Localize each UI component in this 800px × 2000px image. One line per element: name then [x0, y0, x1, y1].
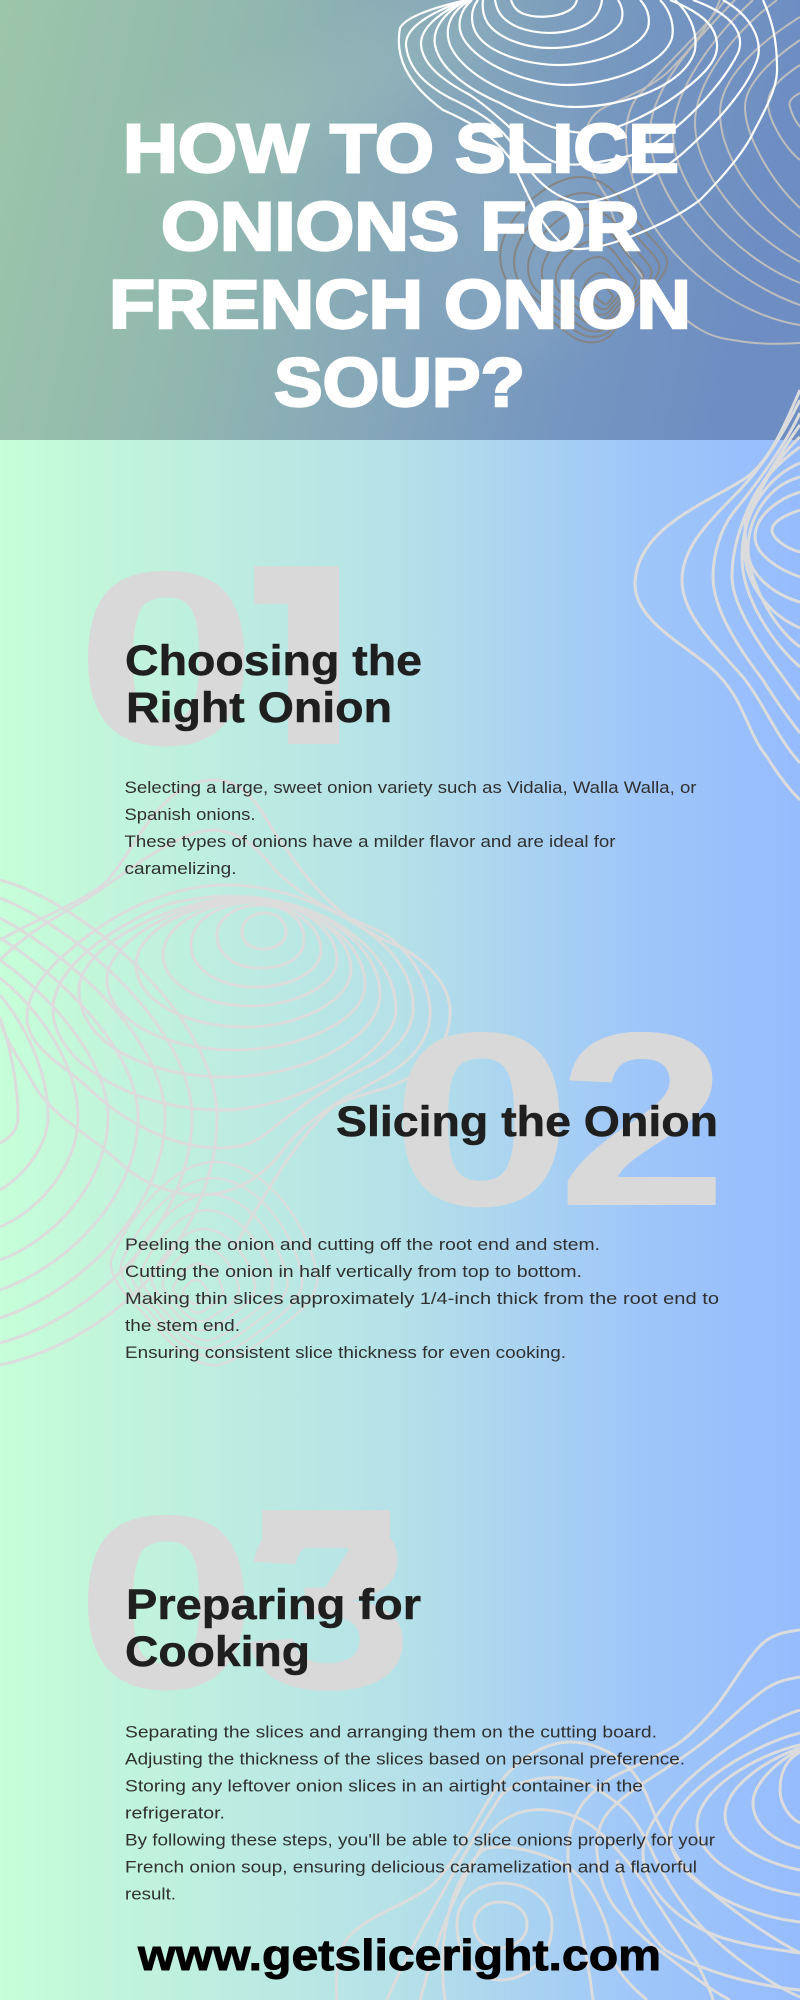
body text step 2: Making thin slices approximately 1/4-inch thick from the root end to	[125, 1290, 719, 1308]
body text step 1	[124, 779, 697, 878]
body text step 3: refrigerator.	[125, 1804, 225, 1822]
body text step 3: French onion soup, ensuring delicious caramelization and a flavorful	[125, 1858, 697, 1876]
number 02: 2	[557, 980, 728, 1258]
body text step 2: Cutting the onion in half vertically from top to bottom.	[125, 1263, 582, 1281]
contour lines: dark small blob	[500, 177, 667, 342]
contour lines: bottom right rings	[336, 1630, 800, 2000]
panel: step 2	[125, 980, 728, 1362]
body text step 3: Adjusting the thickness of the slices based on personal preference.	[125, 1750, 685, 1768]
body text step 3: Separating the slices and arranging them on the cutting board.	[125, 1724, 657, 1742]
body text step 1: Selecting a large, sweet onion variety such as Vidalia, Walla Walla, or	[124, 779, 697, 797]
website url footer: www.getsliceright.com	[137, 1931, 661, 1980]
heading: Choosing the Right Onion	[125, 637, 422, 732]
panel: header banner	[0, 0, 800, 440]
heading: Slicing the Onion: Slicing the Onion	[336, 1098, 718, 1146]
number 01: 1	[212, 519, 417, 797]
heading: Preparing for Cooking: Cooking	[125, 1628, 310, 1676]
body text step 3	[125, 1724, 716, 1904]
contour lines: lower left small blob	[111, 1162, 317, 1365]
body text step 2: Ensuring consistent slice thickness for even cooking.	[125, 1344, 566, 1362]
heading: Choosing the Right Onion: Right Onion	[126, 684, 392, 732]
title	[109, 110, 691, 421]
body text step 2: Peeling the onion and cutting off the root end and stem.	[125, 1236, 600, 1254]
heading: Preparing for Cooking	[125, 1581, 421, 1676]
title: ONIONS FOR	[161, 188, 640, 265]
panel: step 1	[88, 566, 696, 878]
body text step 3: By following these steps, you'll be able to slice onions properly for your	[125, 1832, 716, 1850]
body text step 3: result.	[125, 1886, 176, 1904]
number 03: 3	[243, 1463, 414, 1741]
number 03	[75, 1463, 414, 1741]
heading: Preparing for Cooking: Preparing for	[126, 1581, 421, 1629]
contour lines: gray right rings	[585, 0, 800, 344]
title: SOUP?	[274, 344, 525, 421]
title: FRENCH ONION	[109, 266, 691, 343]
panel: step 3	[75, 1463, 716, 1904]
contour lines: white top rings	[399, 0, 777, 249]
body text step 1: These types of onions have a milder flavor and are ideal for	[124, 833, 616, 851]
heading: Choosing the Right Onion: Choosing the	[125, 637, 422, 685]
contour lines: top right body	[635, 390, 800, 800]
body text step 1: Spanish onions.	[124, 806, 256, 824]
body text step 2	[125, 1236, 719, 1362]
body text step 2: the stem end.	[125, 1317, 240, 1335]
body text step 3: Storing any leftover onion slices in an airtight container in the	[125, 1778, 643, 1796]
contour lines: left middle rings	[0, 780, 450, 1250]
body text step 1: caramelizing.	[124, 860, 236, 878]
title: HOW TO SLICE	[123, 110, 679, 187]
number 01	[88, 566, 339, 746]
number 01: 0	[75, 519, 258, 797]
number 02: 0	[390, 980, 573, 1258]
number 02	[390, 980, 728, 1258]
contour lines: left family arcs	[0, 880, 217, 1365]
number 03: 0	[75, 1463, 258, 1741]
